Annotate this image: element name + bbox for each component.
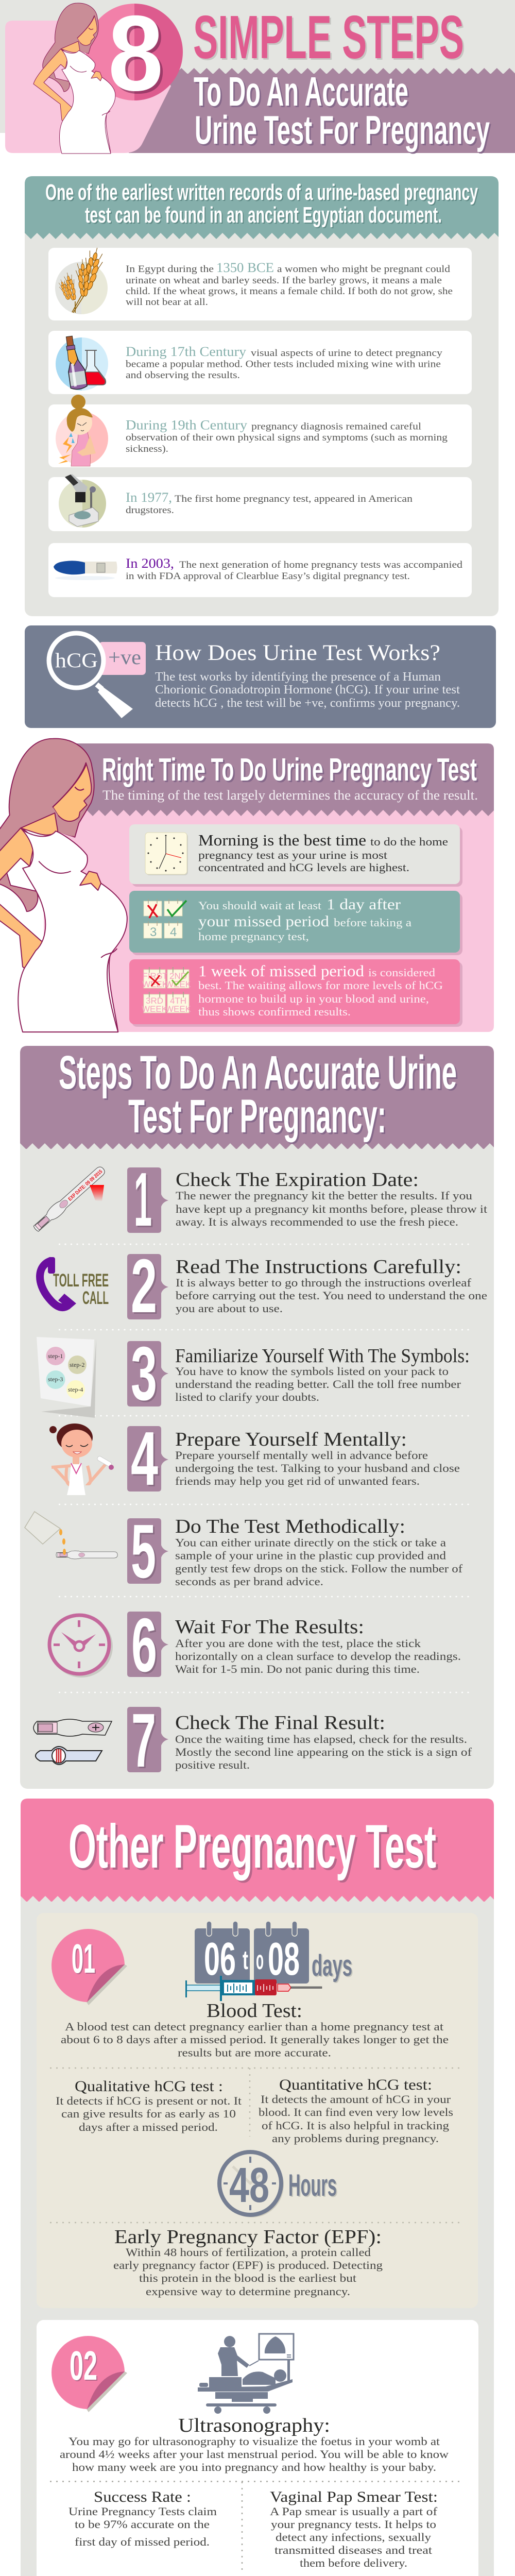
step 3 <box>37 1331 470 1418</box>
text: quantitative hCG: It detects the amount of hCG in your <box>261 2093 451 2106</box>
panel: steps <box>20 1046 494 1789</box>
text: quantitative hCG: any problems during pregnancy. <box>272 2132 439 2145</box>
icon: microscope <box>59 474 106 528</box>
icon: wall clock <box>49 1615 113 1677</box>
text: pap smear: transmitted diseases and treat <box>274 2544 432 2556</box>
icon: week calendars <box>142 967 192 1014</box>
icon: ultrasound scan <box>198 2334 294 2414</box>
card: one day after: You should wait at least <box>198 899 321 912</box>
step 1: have kept up a pregnancy kit months before, please throw it <box>176 1202 487 1215</box>
icon: magnifier with hCG +ve: hCG <box>55 649 98 672</box>
icon: symbols sheet: step-2 <box>70 1361 84 1368</box>
step 3: Familiarize Yourself With The Symbols: <box>175 1345 470 1367</box>
text: qualitative hCG: can give results for as early as 10 <box>61 2107 236 2120</box>
step 7 <box>33 1698 472 1783</box>
icon: syringe <box>185 1976 322 2001</box>
card: 2003: In 2003, <box>126 556 174 571</box>
icon: digital test stick <box>54 561 117 580</box>
icon: week calendars: 2ND <box>169 971 187 981</box>
step 5: seconds as per brand advice. <box>175 1575 323 1588</box>
icon: symbols sheet: step-3 <box>48 1376 63 1383</box>
calendar: 6 to 8 days: t <box>243 1945 248 1975</box>
text: early pregnancy factor: early pregnancy factor (EPF) is produced. Detecting <box>113 2259 383 2272</box>
step 2: before carrying out the test. You need to understand the one <box>176 1289 487 1302</box>
text: quantitative hCG <box>259 2076 453 2145</box>
step 6: Wait For The Results: <box>175 1616 364 1638</box>
step 3: understand the reading better. Call the toll free number <box>175 1378 461 1391</box>
card: morning: concentrated and hCG levels are highest. <box>198 861 409 874</box>
step 6: 6 <box>131 1603 157 1688</box>
step 6: After you are done with the test, place the stick <box>175 1637 421 1650</box>
text: early pregnancy factor: Within 48 hours of fertilization, a protein called <box>126 2246 371 2259</box>
card: 1350 BCE: child. If the wheat grows, it means a female child. If both do not grow, she <box>126 286 453 297</box>
panel: right time to test <box>0 739 494 1032</box>
card: morning: to do the home <box>370 835 448 848</box>
text: ultrasonography <box>60 2415 449 2473</box>
step 7: Once the waiting time has elapsed, check for the results. <box>175 1733 467 1745</box>
text: quantitative hCG: blood. It can find even very low levels <box>259 2106 453 2119</box>
text: success rate: to be 97% accurate on the <box>75 2518 210 2531</box>
icon: week calendars: WEEK <box>165 979 192 989</box>
card: one day after: before taking a <box>334 916 411 929</box>
text: success rate <box>68 2488 217 2548</box>
calendar: 6 to 8 days: days <box>312 1949 352 1982</box>
badge 01: 01 <box>72 1936 95 1981</box>
step 6: Wait for 1-5 min. Do not panic during this time. <box>175 1663 420 1675</box>
header banner <box>0 0 515 154</box>
icon: toll free call: CALL <box>82 1288 109 1308</box>
badge 02: 02 <box>70 2343 97 2388</box>
badge 01 <box>52 1929 127 2005</box>
text: success rate: first day of missed period. <box>75 2535 210 2548</box>
card: 1977: drugstores. <box>126 505 174 516</box>
icon: symbols sheet <box>37 1337 96 1418</box>
icon: week calendars: WEEK <box>165 1004 192 1014</box>
card: 1350 BCE: 1350 BCE <box>216 260 274 275</box>
text: ultrasonography: You may go for ultrasonography to visualize the foetus in your womb at <box>68 2435 440 2448</box>
icon: 48 hours clock: 48 <box>229 2158 269 2213</box>
icon: week calendars: 3RD <box>146 996 163 1006</box>
calendar: 6 to 8 days: 06 <box>204 1934 236 1985</box>
text: pap smear: them before delivery. <box>300 2556 407 2569</box>
heading and explanation: detects hCG , the test will be +ve, confirms your pregnancy. <box>155 697 460 710</box>
illustration: pregnant woman <box>33 3 115 154</box>
text: qualitative hCG: Qualitative hCG test : <box>75 2078 223 2095</box>
icon: week calendars: FIRST <box>142 971 168 981</box>
card: 17th century: became a popular method. Other tests included mixing wine with urine <box>126 359 441 370</box>
icon: calendar grid: 3 <box>150 925 157 939</box>
card: blood test <box>37 1913 478 2308</box>
text: qualitative hCG: days after a missed period. <box>79 2121 218 2133</box>
text: blood test: results but are more accurate. <box>178 2046 331 2059</box>
card: one week: is considered <box>368 966 435 979</box>
icon: symbols sheet: step-1 <box>48 1352 63 1360</box>
card: 19th century: observation of their own physical signs and symptoms (such as morning <box>126 432 448 443</box>
step 2: you are about to use. <box>176 1302 283 1315</box>
step 7: positive result. <box>175 1758 250 1771</box>
card: 17th century: During 17th Century <box>126 344 246 359</box>
icon: wine bottle and flask <box>56 335 108 391</box>
step 2: It is always better to go through the instructions overleaf <box>176 1276 472 1289</box>
card: 1350 BCE <box>48 246 472 320</box>
card: 1350 BCE: will not bear at all. <box>126 297 208 308</box>
card: 17th century: and observing the results. <box>126 370 240 381</box>
heading: earliest records <box>45 180 478 228</box>
text: blood test: Blood Test: <box>207 2000 302 2022</box>
step 2 <box>40 1244 487 1329</box>
card: 1350 BCE: a women who might be pregnant could <box>277 264 451 275</box>
step 4: Prepare yourself mentally well in advance before <box>175 1449 428 1462</box>
card: 1350 BCE: urinate on wheat and barley seeds. If the barley grows, it means a male <box>126 275 442 286</box>
card: 19th century: pregnancy diagnosis remained careful <box>251 421 421 432</box>
text: early pregnancy factor: expensive way to determine pregnancy. <box>146 2285 350 2298</box>
text: qualitative hCG: It detects if hCG is present or not. It <box>56 2094 242 2107</box>
step 5: Do The Test Methodically: <box>175 1516 405 1537</box>
heading and explanation <box>155 641 460 710</box>
icon: wheat <box>55 246 108 314</box>
text: blood test: about 6 to 8 days after a missed period. It generally takes longer to get the <box>61 2033 449 2046</box>
text: early pregnancy factor: this protein in the blood is the earliest but <box>139 2272 356 2284</box>
text: ultrasonography: how many week are you into pregnancy and how healthy is your baby. <box>72 2461 436 2473</box>
icon: week calendars: 4TH <box>170 996 186 1006</box>
panel: how does the test work <box>25 625 496 728</box>
text: pap smear: detect any infections, sexually <box>276 2531 431 2544</box>
text: qualitative hCG <box>56 2078 242 2133</box>
text: ultrasonography: Ultrasonography: <box>178 2415 330 2436</box>
icon: week calendars: WEEK <box>142 979 168 989</box>
icon: 48 hours clock: Hours <box>288 2168 337 2202</box>
card: 1350 BCE: In Egypt during the <box>126 264 214 275</box>
step 3: 3 <box>131 1331 157 1416</box>
calendar: 6 to 8 days <box>195 1921 352 1985</box>
icon: toll free call: TOLL FREE <box>53 1270 109 1291</box>
icon: symbols sheet: step-4 <box>68 1386 83 1393</box>
card: 2003: The next generation of home pregnancy tests was accompanied <box>179 560 463 570</box>
card: one week: 1 week of missed period <box>198 962 365 980</box>
step 7: Check The Final Result: <box>175 1712 385 1734</box>
card: morning <box>129 824 462 887</box>
card: morning: Morning is the best time <box>198 831 366 849</box>
card: 1977: In 1977, <box>126 490 172 505</box>
step 6: horizontally on a clean surface to develop the readings. <box>175 1650 461 1663</box>
card: 19th century: sickness). <box>126 444 168 454</box>
heading: steps <box>59 1046 457 1143</box>
number 8 badge <box>86 0 183 113</box>
step 4: friends may help you get rid of unwanted fears. <box>175 1475 420 1487</box>
icon: calendar grid: 4 <box>170 925 177 939</box>
step 5: 5 <box>131 1509 156 1594</box>
step 1: away. It is always recommended to use the fresh piece. <box>176 1215 458 1228</box>
step 4: Prepare Yourself Mentally: <box>175 1429 407 1450</box>
step 6 <box>49 1603 461 1688</box>
step 4: 4 <box>131 1416 158 1501</box>
step 5: You can either urinate directly on the stick or take a <box>175 1536 446 1549</box>
text: early pregnancy factor: Early Pregnancy Factor (EPF): <box>114 2226 382 2248</box>
card: one week: thus shows confirmed results. <box>198 1005 351 1018</box>
card: one day after <box>129 891 462 955</box>
panel: history timeline <box>25 176 499 616</box>
heading: right time <box>102 752 478 803</box>
text: pap smear: your pregnancy tests. It helps to <box>271 2518 436 2531</box>
icon: expiry date stick: EXP DATE: 09 09 2015 <box>67 1168 104 1202</box>
heading and explanation: Chorionic Gonadotropin Hormone (hCG). If your urine test <box>155 683 460 697</box>
card: morning: pregnancy test as your urine is most <box>198 849 387 861</box>
text: quantitative hCG: of hCG. It is also helpful in tracking <box>262 2119 449 2132</box>
text: pap smear: Vaginal Pap Smear Test: <box>270 2488 438 2505</box>
card: 17th century <box>48 331 472 394</box>
card: one day after: 1 day after <box>327 896 401 913</box>
step 4 <box>49 1416 460 1501</box>
text: pap smear: A Pap smear is usually a part of <box>270 2505 438 2518</box>
text: blood test <box>61 2000 449 2059</box>
text: early pregnancy factor <box>113 2226 383 2298</box>
step 1: The newer the pregnancy kit the better the results. If you <box>176 1189 472 1202</box>
step 3: You have to know the symbols listed on your pack to <box>175 1365 449 1378</box>
icon: toll free call <box>40 1257 109 1309</box>
icon: cup pouring on stick <box>25 1512 117 1559</box>
card: 1977 <box>48 474 472 531</box>
text: success rate: Success Rate : <box>94 2488 191 2505</box>
icon: magnifier with hCG +ve: +ve <box>108 646 141 669</box>
card: 2003: in with FDA approval of Clearblue Easy’s digital pregnancy test. <box>126 571 410 582</box>
text: ultrasonography: around 4½ weeks after your last menstrual period. You will be able to know <box>60 2448 449 2461</box>
step 1: Check The Expiration Date: <box>176 1169 419 1191</box>
icon: week calendars: WEEK <box>142 1004 168 1014</box>
icon: expiry date stick <box>31 1164 107 1234</box>
icon: result sticks <box>33 1719 112 1765</box>
illustration: pregnant woman large <box>0 739 127 1032</box>
step 3: listed to clarify your doubts. <box>175 1391 319 1403</box>
icon: magnifier with hCG +ve <box>49 633 146 718</box>
card: 17th century: visual aspects of urine to detect pregnancy <box>251 348 443 359</box>
text: quantitative hCG: Quantitative hCG test: <box>279 2076 432 2093</box>
card: 19th century <box>48 395 472 467</box>
icon: woman with morning sickness <box>56 395 108 466</box>
calendar: 6 to 8 days: 08 <box>268 1934 300 1985</box>
card: one week <box>129 959 462 1027</box>
card: one week: best. The waiting allows for more levels of hCG <box>198 979 443 992</box>
title <box>193 3 490 152</box>
card: 2003 <box>48 543 472 597</box>
icon: calm woman holding test <box>49 1423 114 1495</box>
step 1 <box>31 1157 487 1242</box>
icon: calendar grid <box>144 899 186 939</box>
step 2: Read The Instructions Carefully: <box>176 1256 461 1278</box>
step 1: 1 <box>134 1157 152 1242</box>
card: 1977: The first home pregnancy test, appeared in American <box>175 494 413 504</box>
card: ultrasonography <box>37 2320 478 2576</box>
heading and explanation: The test works by identifying the presence of a Human <box>155 670 441 684</box>
heading and explanation: How Does Urine Test Works? <box>155 641 440 665</box>
step 2: 2 <box>131 1244 157 1329</box>
card: one day after: home pregnancy test, <box>198 930 309 943</box>
step 5 <box>25 1509 463 1594</box>
text: success rate: Urine Pregnancy Tests claim <box>68 2505 217 2518</box>
text: blood test: A blood test can detect pregnancy earlier than a home pregnancy test at <box>65 2020 443 2033</box>
card: 19th century: During 19th Century <box>126 417 247 433</box>
icon: 48 hours clock <box>219 2152 337 2217</box>
badge 02 <box>52 2336 127 2412</box>
step 7: 7 <box>131 1698 156 1783</box>
step 5: sample of your urine in the plastic cup provided and <box>175 1549 446 1562</box>
heading: right time: The timing of the test largely determines the accuracy of the result. <box>102 788 478 803</box>
calendar: 6 to 8 days: o <box>256 1945 264 1975</box>
step 4: undergoing the test. Talking to your husband and close <box>175 1462 460 1475</box>
text: pap smear <box>270 2488 438 2569</box>
card: one week: hormone to build up in your blood and urine, <box>198 992 429 1005</box>
panel: other pregnancy tests <box>21 1799 494 2576</box>
step 5: gently test few drops on the stick. Follow the number of <box>175 1562 463 1575</box>
card: one day after: your missed period <box>198 913 329 930</box>
step 7: Mostly the second line appearing on the stick is a sign of <box>175 1745 472 1758</box>
icon: clock <box>145 833 188 875</box>
